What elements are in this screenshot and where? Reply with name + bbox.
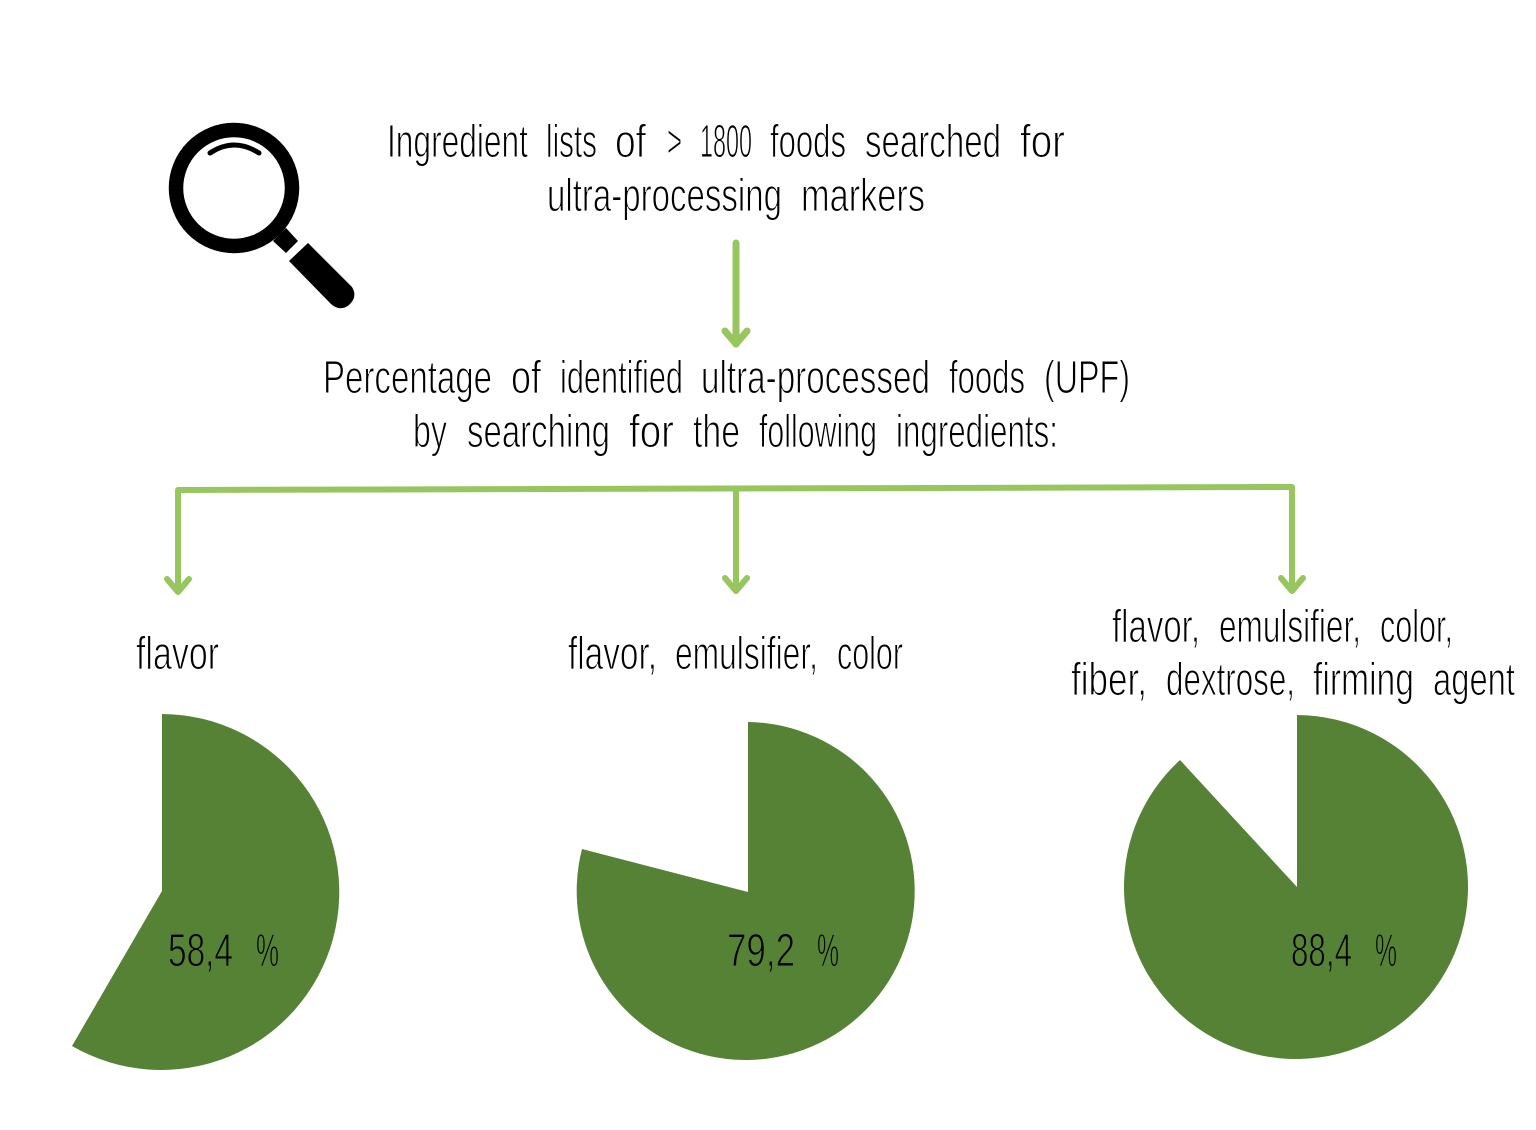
label: flavor, emulsifier, color, fiber, dextrose, firming agent: firming [1313,653,1414,705]
heading: ingredient lists: searched [865,115,1001,167]
pie chart: 79,2 % [577,722,915,1060]
pie chart: 58,4 %: % [256,924,279,976]
label: flavor, emulsifier, color, fiber, dextrose, firming agent: fiber, [1071,653,1147,705]
heading: ingredient lists: ultra-processing [547,169,782,221]
heading: ingredient lists: for [1020,115,1065,167]
heading: percentage of identified UPF: foods [949,351,1025,403]
heading: ingredient lists: foods [770,115,846,167]
label: flavor: flavor [136,627,219,679]
heading: percentage of identified UPF: Percentage [323,351,492,403]
heading: percentage of identified UPF: for [629,405,674,457]
label: flavor, emulsifier, color, fiber, dextrose, firming agent: color, [1380,600,1453,652]
heading: percentage of identified UPF: of [511,351,541,403]
label: flavor, emulsifier, color, fiber, dextrose, firming agent: emulsifier, [1219,600,1361,652]
pie chart: 58,4 %: 58,4 [168,924,233,976]
icon: magnifying glass [176,130,354,308]
heading: ingredient lists: markers [801,169,925,221]
heading: percentage of identified UPF: ultra-processed [701,351,930,403]
label: flavor, emulsifier, color, fiber, dextrose, firming agent: flavor, [1112,600,1200,652]
heading: percentage of identified UPF: ingredients: [896,405,1058,457]
arrow: down to percentage text [725,243,747,344]
pie chart: 88,4 % [1124,715,1468,1059]
heading: ingredient lists: lists [546,115,597,167]
heading: percentage of identified UPF: by [413,405,447,457]
label: flavor, emulsifier, color, fiber, dextrose, firming agent: dextrose, [1166,653,1295,705]
arrows: branching connector [167,487,1303,592]
heading: percentage of identified UPF [323,351,1130,457]
pie chart: 79,2 %: % [817,924,839,976]
heading: percentage of identified UPF: the [693,405,740,457]
label: flavor, emulsifier, color, fiber, dextrose, firming agent [1071,600,1515,705]
pie chart: 88,4 %: 88,4 [1291,924,1352,976]
heading: percentage of identified UPF: searching [467,405,610,457]
label: flavor, emulsifier, color: color [837,627,903,679]
heading: ingredient lists: Ingredient [387,115,528,167]
pie chart: 79,2 %: 79,2 [727,924,795,976]
heading: percentage of identified UPF: (UPF) [1044,351,1130,403]
heading: ingredient lists: 1800 [700,115,752,167]
label: flavor, emulsifier, color: emulsifier, [675,627,818,679]
heading: ingredient lists [387,115,1065,221]
pie chart: 88,4 %: % [1375,924,1397,976]
label: flavor, emulsifier, color [568,627,903,679]
heading: percentage of identified UPF: identified [560,351,683,403]
label: flavor, emulsifier, color: flavor, [568,627,657,679]
pie chart: 58,4 % [72,714,339,1070]
heading: ingredient lists: > [667,115,682,167]
heading: ingredient lists: of [615,115,646,167]
heading: percentage of identified UPF: following [759,405,877,457]
